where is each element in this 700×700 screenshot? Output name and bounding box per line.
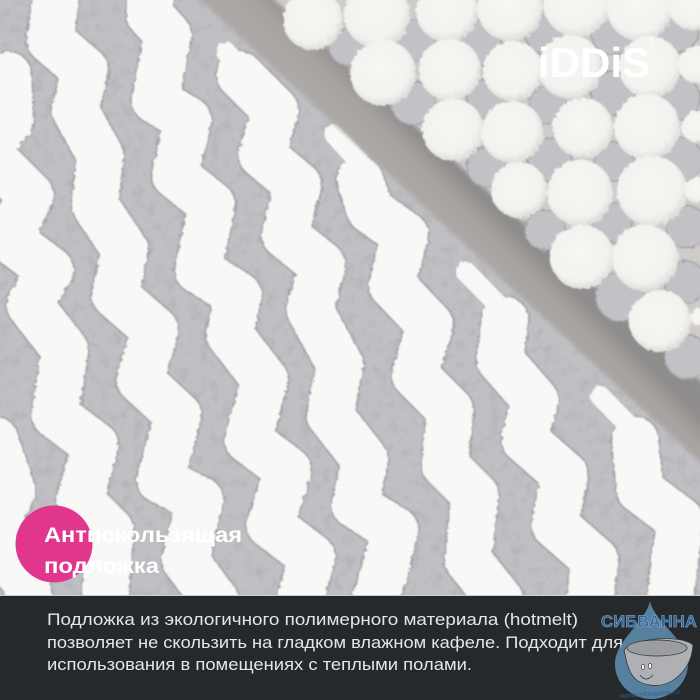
description text: Подложка из экологичного полимерного материала (hotmelt) — [47, 610, 578, 629]
heading: anti-slip backing: Антискользящая — [44, 524, 242, 547]
registered mark: ® — [649, 37, 655, 45]
thin white slivers running along the band — [226, 52, 645, 442]
watermark: Sibvanna drop with bathtub — [601, 601, 697, 700]
brand name: СИБВАННА — [601, 613, 697, 631]
heading: anti-slip backing — [44, 524, 242, 578]
bathtub — [624, 639, 693, 685]
grey small pompoms — [308, 0, 700, 379]
description text: позволяет не скользить на гладком влажном кафеле. Подходит для — [47, 633, 623, 652]
dark description panel — [0, 595, 700, 700]
heading line 2: подложка — [44, 555, 159, 578]
description text: использования в помещениях с теплыми полами. — [47, 655, 472, 674]
logo: iDDiS: iDDiS — [538, 39, 650, 86]
description text — [47, 610, 623, 674]
pink circle badge — [16, 506, 92, 582]
white large pompoms — [283, 0, 700, 352]
pompom mat backing — [262, 0, 700, 388]
grey diagonal edge band — [196, 0, 700, 466]
website: www.sibvanna.ru — [619, 689, 680, 700]
water drop — [615, 601, 688, 699]
